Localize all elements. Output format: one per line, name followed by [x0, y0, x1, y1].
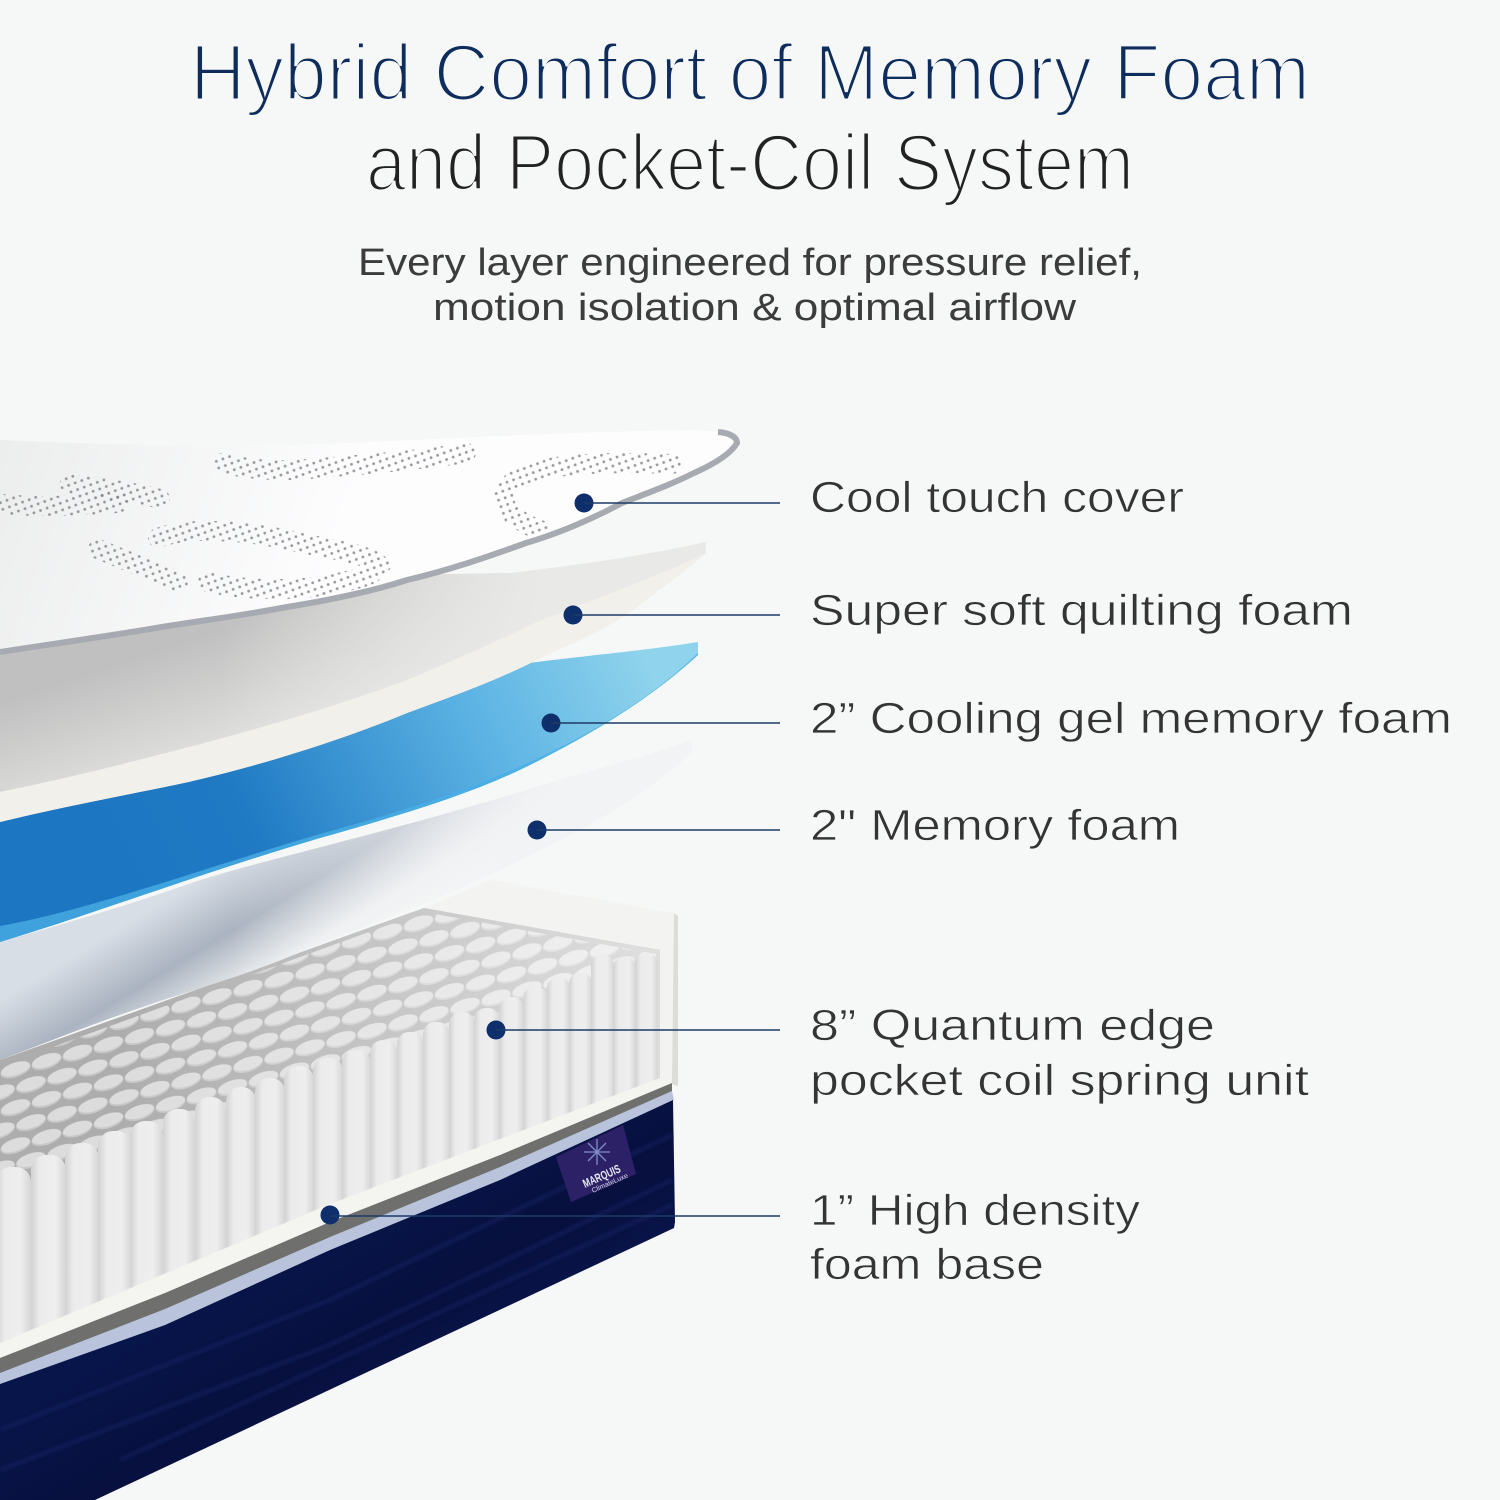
- pocket coil spring unit: [0, 880, 678, 1367]
- memory foam layer: [0, 740, 692, 1060]
- callout: high density foam base: foam base: [810, 1240, 1044, 1289]
- high density foam base: [0, 1078, 675, 1500]
- title: and Pocket-Coil System: [366, 118, 1134, 207]
- cool touch cover layer: [0, 430, 737, 652]
- callout: cooling gel memory foam: 2” Cooling gel memory foam: [810, 694, 1452, 743]
- subtitle: [358, 242, 1142, 329]
- callout: cool touch cover: Cool touch cover: [810, 473, 1184, 522]
- cooling gel memory foam layer: [0, 642, 698, 942]
- callout: high density foam base: [320, 1186, 1140, 1289]
- callout: pocket coil spring unit: 8” Quantum edge: [810, 1001, 1215, 1050]
- callout: memory foam: [528, 801, 1180, 850]
- callout: pocket coil spring unit: pocket coil spring unit: [810, 1056, 1309, 1105]
- callout: pocket coil spring unit: [486, 1001, 1309, 1105]
- mattress exploded illustration: [0, 430, 737, 1500]
- callout: cooling gel memory foam: [542, 694, 1452, 743]
- cover quilt pattern: [2, 453, 672, 589]
- super soft quilting foam layer: [0, 542, 706, 822]
- cover edge piping: [0, 432, 737, 652]
- callout: super soft quilting foam: Super soft quilting foam: [810, 586, 1353, 635]
- subtitle: Every layer engineered for pressure relief,: [358, 242, 1142, 284]
- subtitle: motion isolation & optimal airflow: [433, 287, 1077, 329]
- callout: cool touch cover: [574, 473, 1184, 522]
- callout: super soft quilting foam: [564, 586, 1353, 635]
- brand label: [556, 1125, 636, 1202]
- coil columns: [0, 953, 658, 1367]
- title: Hybrid Comfort of Memory Foam: [190, 28, 1310, 117]
- callout: memory foam: 2" Memory foam: [810, 801, 1180, 850]
- title: [190, 28, 1310, 207]
- brand label: MARQUIS: [581, 1162, 623, 1191]
- brand label: ClimateLuxe: [591, 1173, 629, 1195]
- callout: high density foam base: 1” High density: [810, 1186, 1140, 1235]
